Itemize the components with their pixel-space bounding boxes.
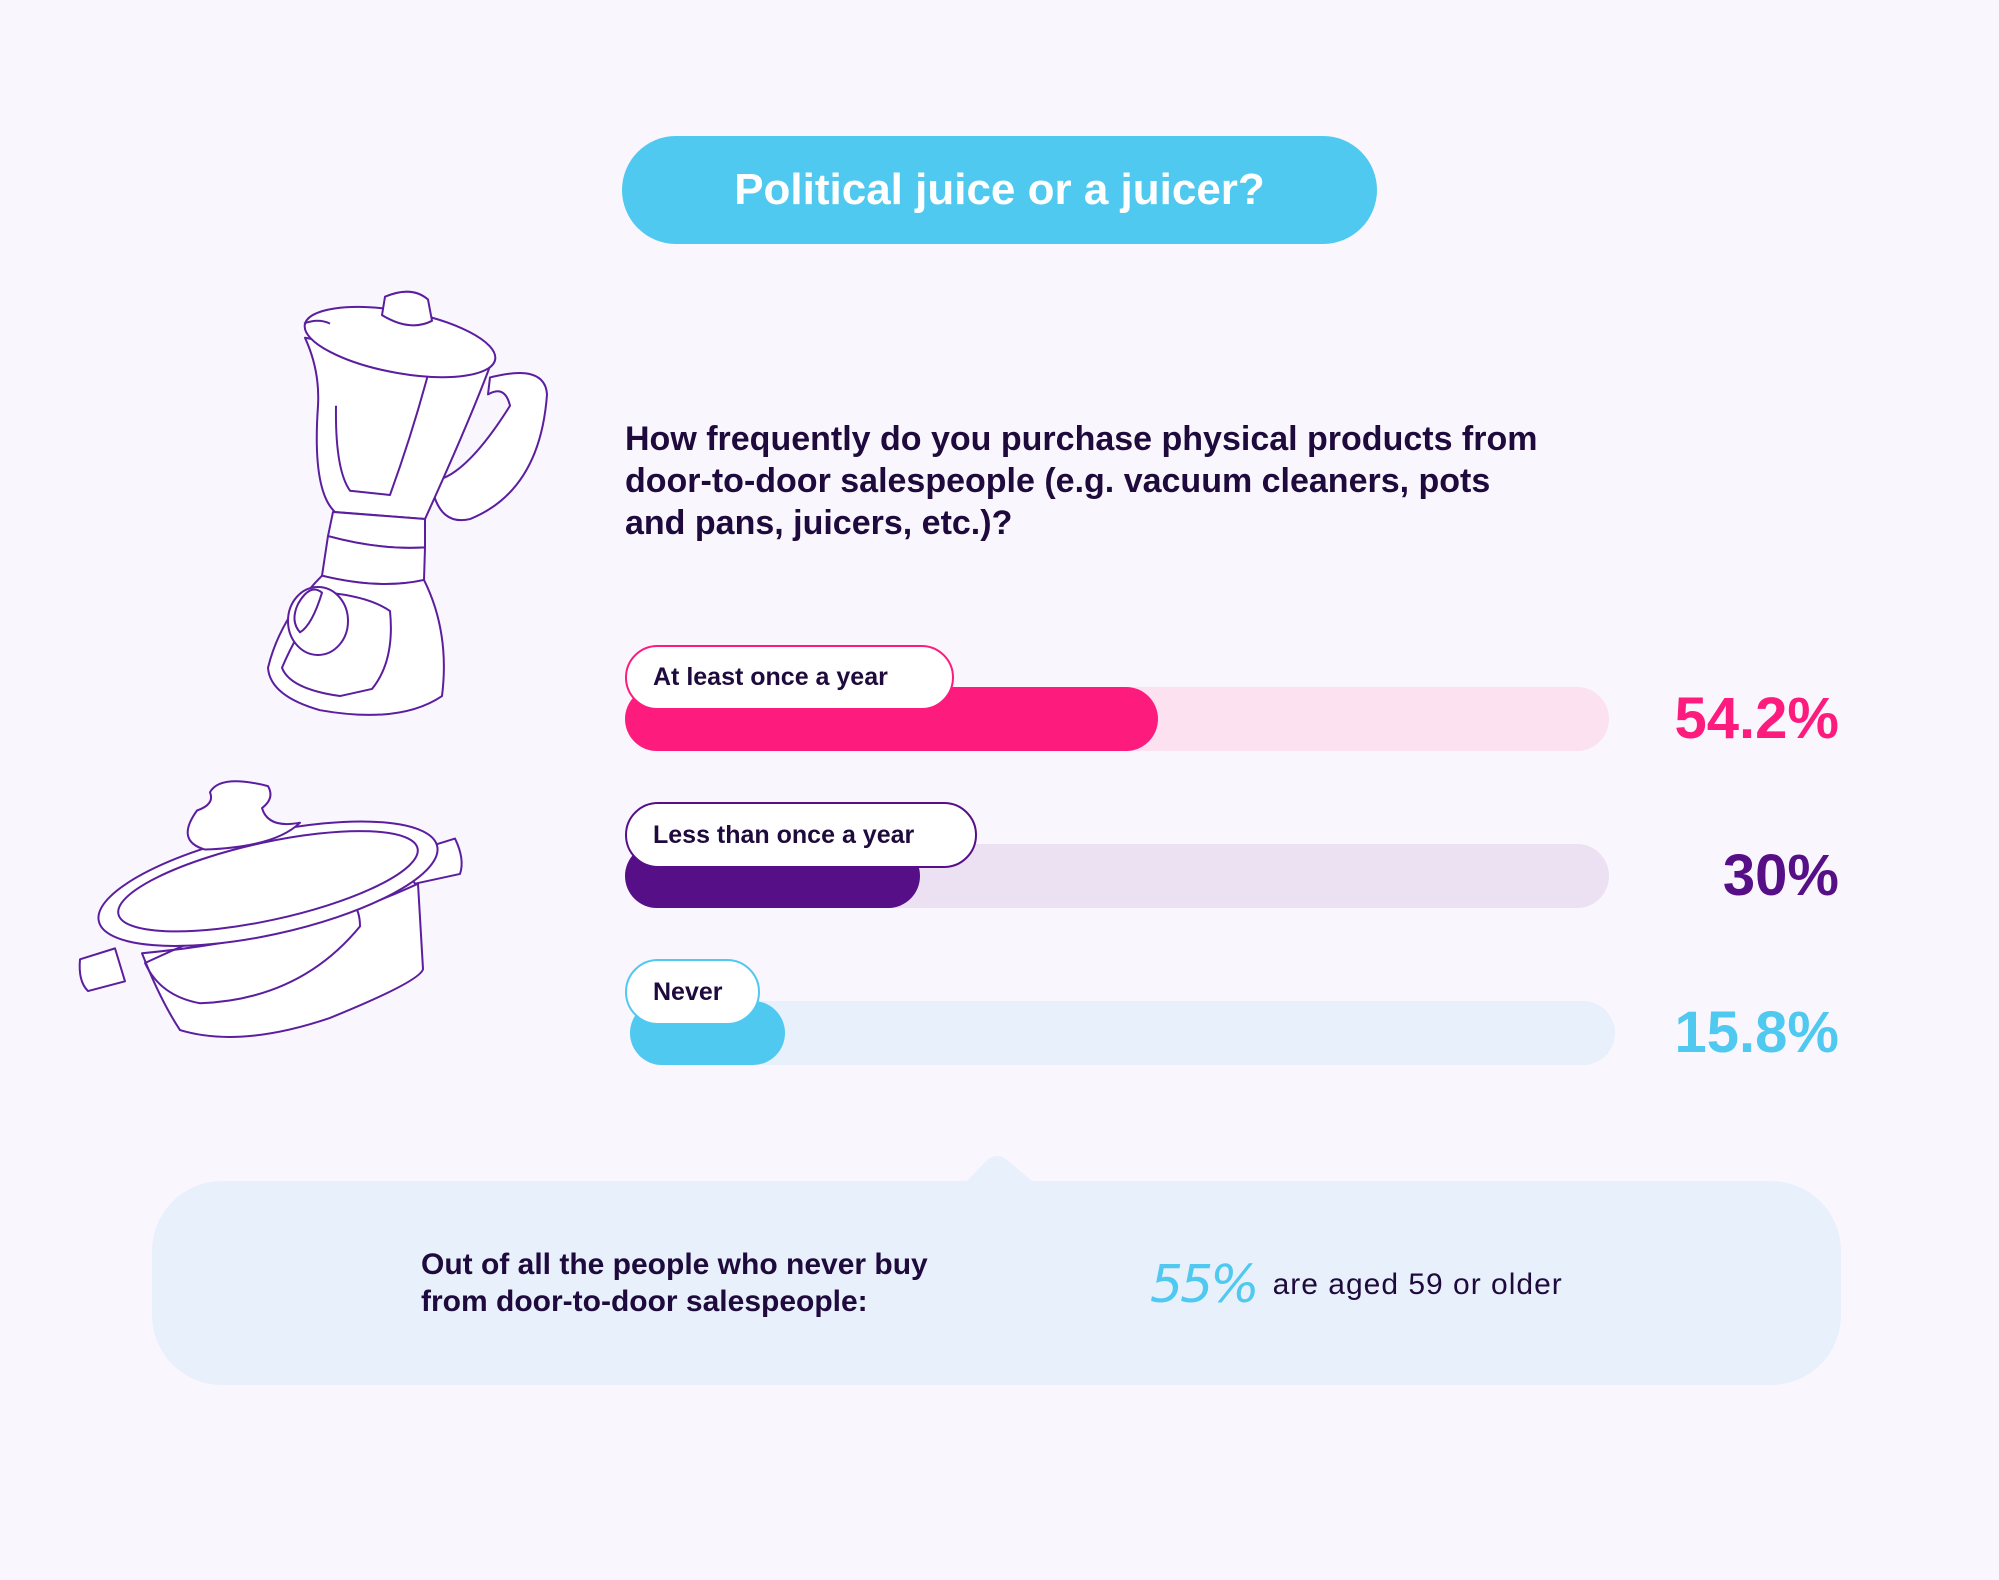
callout stat: are aged 59 or older [1273,1268,1563,1301]
bar: at least once a year: At least once a year [653,663,888,691]
bar: never: Never [653,978,722,1006]
callout text: from door-to-door salespeople: [421,1285,868,1318]
icon: pot [78,780,463,1038]
callout text: Out of all the people who never buy [421,1248,928,1281]
bar: less than once a year: Less than once a year [653,820,914,848]
callout panel [152,1156,1841,1385]
title [622,136,1377,244]
question text: How frequently do you purchase physical products from [625,420,1537,458]
bar: less than once a year [625,802,1839,908]
bar chart [625,645,1839,1065]
callout stat [1150,1255,1563,1315]
callout stat: 55% [1150,1255,1257,1315]
title: Political juice or a juicer? [734,165,1265,214]
icon: blender [267,290,548,716]
bar: less than once a year: 30% [1723,843,1839,908]
question text: door-to-door salespeople (e.g. vacuum cleaners, pots [625,462,1490,500]
callout text [421,1248,928,1318]
question text [625,420,1537,542]
bar: never: 15.8% [1675,1000,1839,1065]
bar: at least once a year: 54.2% [1675,686,1839,751]
bar: at least once a year [625,645,1839,751]
bar: never [625,959,1839,1065]
question text: and pans, juicers, etc.)? [625,504,1012,542]
